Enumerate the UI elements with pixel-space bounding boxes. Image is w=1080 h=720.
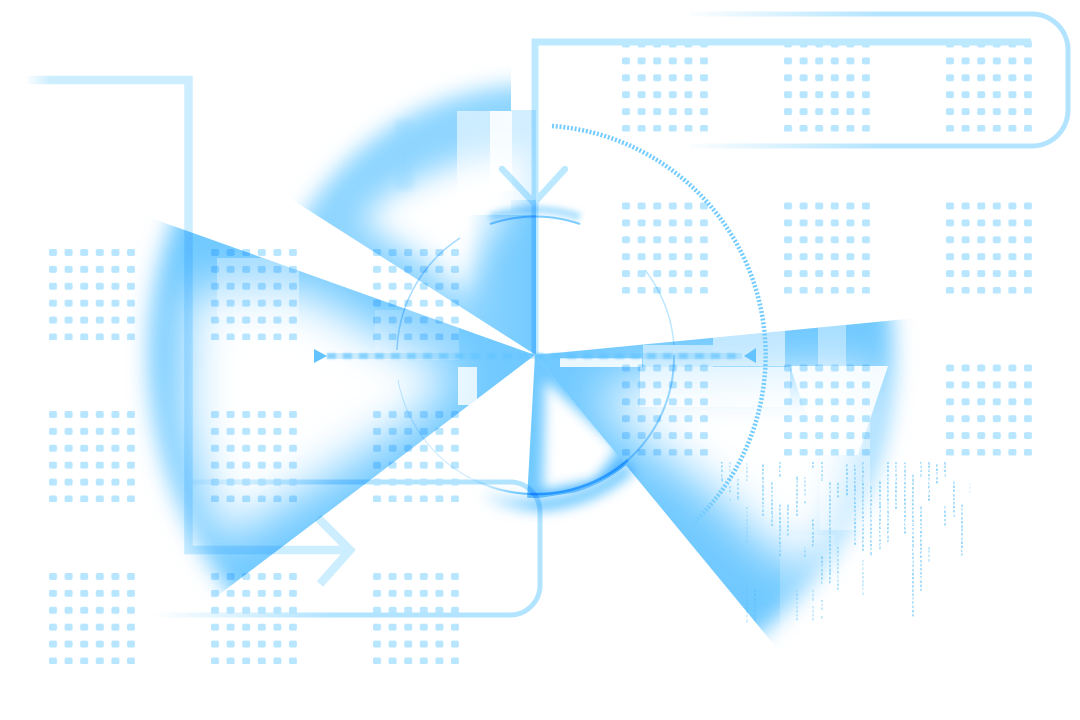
micro text streams: TKRVA — [943, 507, 947, 528]
wedge: right — [535, 319, 909, 644]
double-headed dashed axis arrow — [314, 348, 756, 363]
micro text streams: QPEYVKFZ — [786, 505, 790, 538]
frame: bottom rounded bracket — [150, 482, 540, 615]
micro text streams: K143Z — [820, 462, 824, 482]
radial wedges — [132, 71, 909, 644]
micro text streams: LURHF — [745, 463, 749, 484]
connector: left elbow arrow — [28, 80, 350, 584]
wedge: top — [295, 71, 536, 355]
micro text streams: NLJKTEUIX — [745, 507, 749, 544]
micro text streams: HJG E — [820, 600, 824, 620]
micro text streams: BHFRTQOAWSTXU — [761, 465, 765, 518]
micro text streams: TPYDQ — [736, 480, 740, 500]
micro text streams: SFRBMQAZPKTJX — [778, 505, 782, 558]
micro text streams: CNREFUMAJ — [952, 482, 956, 519]
micro text streams: F14Z — [919, 462, 923, 478]
micro text streams: AQXBGDEHPFRUZTYWKQLAOJVSNMKDEGTFXRA — [911, 475, 915, 618]
micro text streams: HMQZTXAB — [753, 590, 757, 623]
dot grids — [49, 40, 1032, 664]
micro text streams: TPM — [803, 547, 807, 559]
micro text streams: EAQ VOUH — [811, 590, 815, 623]
micro text streams: EOYTSRGQJEA — [770, 483, 774, 528]
micro text streams: LKBTERAM — [795, 590, 799, 623]
connector: top bar and down arrow — [502, 42, 1031, 355]
micro text streams: CSPAX H — [803, 477, 807, 506]
micro text streams — [720, 462, 972, 624]
frame: top right rounded bracket — [690, 14, 1068, 146]
micro text streams: FIRZLNSQUEYPKWTJAXHFBD — [861, 463, 865, 553]
micro text streams: AFP G HM J — [728, 462, 732, 503]
micro text streams: QJUSATHEXD — [795, 477, 799, 518]
micro text streams: RYJEMWXUPOFKTZSBGVDUAQHKP — [828, 483, 832, 586]
micro text streams: BORWTQMJSHFKLTAZV — [878, 482, 882, 552]
micro text streams: KE — [811, 462, 815, 470]
dotted arc — [552, 126, 766, 532]
micro text streams: OZRKVTMPEBGFHUXUATKWS — [919, 507, 923, 593]
micro text streams: ACTDREMPQ — [745, 587, 749, 624]
micro text streams: VKLE — [778, 462, 782, 478]
micro text streams: KUTSOFNLCHE — [836, 547, 840, 592]
micro text streams: ROTXUAL — [820, 557, 824, 586]
micro text streams: AHKG — [836, 483, 840, 499]
micro text streams: UFZBRQETK — [861, 560, 865, 597]
micro text streams: XCTUJWHRKDVM — [894, 462, 898, 511]
micro text streams: PFULQ — [720, 462, 724, 482]
ring: inner circle glow and arcs — [397, 210, 674, 505]
micro text streams: QFUO — [927, 547, 931, 563]
wedge: bottom inner — [527, 355, 626, 498]
micro text streams: QSWJ — [943, 462, 947, 478]
micro text streams: QHCUTLPJAM — [927, 462, 931, 503]
micro text streams: PBTAR — [935, 465, 939, 486]
micro text streams: PBYHKOF — [811, 520, 815, 549]
micro text streams: PGBUTWNM — [845, 465, 849, 498]
micro text streams: GTUERQXKZBNLF — [960, 505, 964, 558]
micro text streams: ZIQSTKAFPBRGUMCLEW — [903, 462, 907, 536]
micro text streams: LKZSFQRTEAWVJXMBOYTH — [853, 465, 857, 547]
micro text streams: UFE — [968, 483, 972, 495]
wedge: left — [132, 220, 535, 598]
micro text streams: SFJAGLUPVDWKXERTQ — [869, 487, 873, 557]
micro text streams: ONRACKEUFRTTQSYHKPAZ — [886, 462, 890, 544]
